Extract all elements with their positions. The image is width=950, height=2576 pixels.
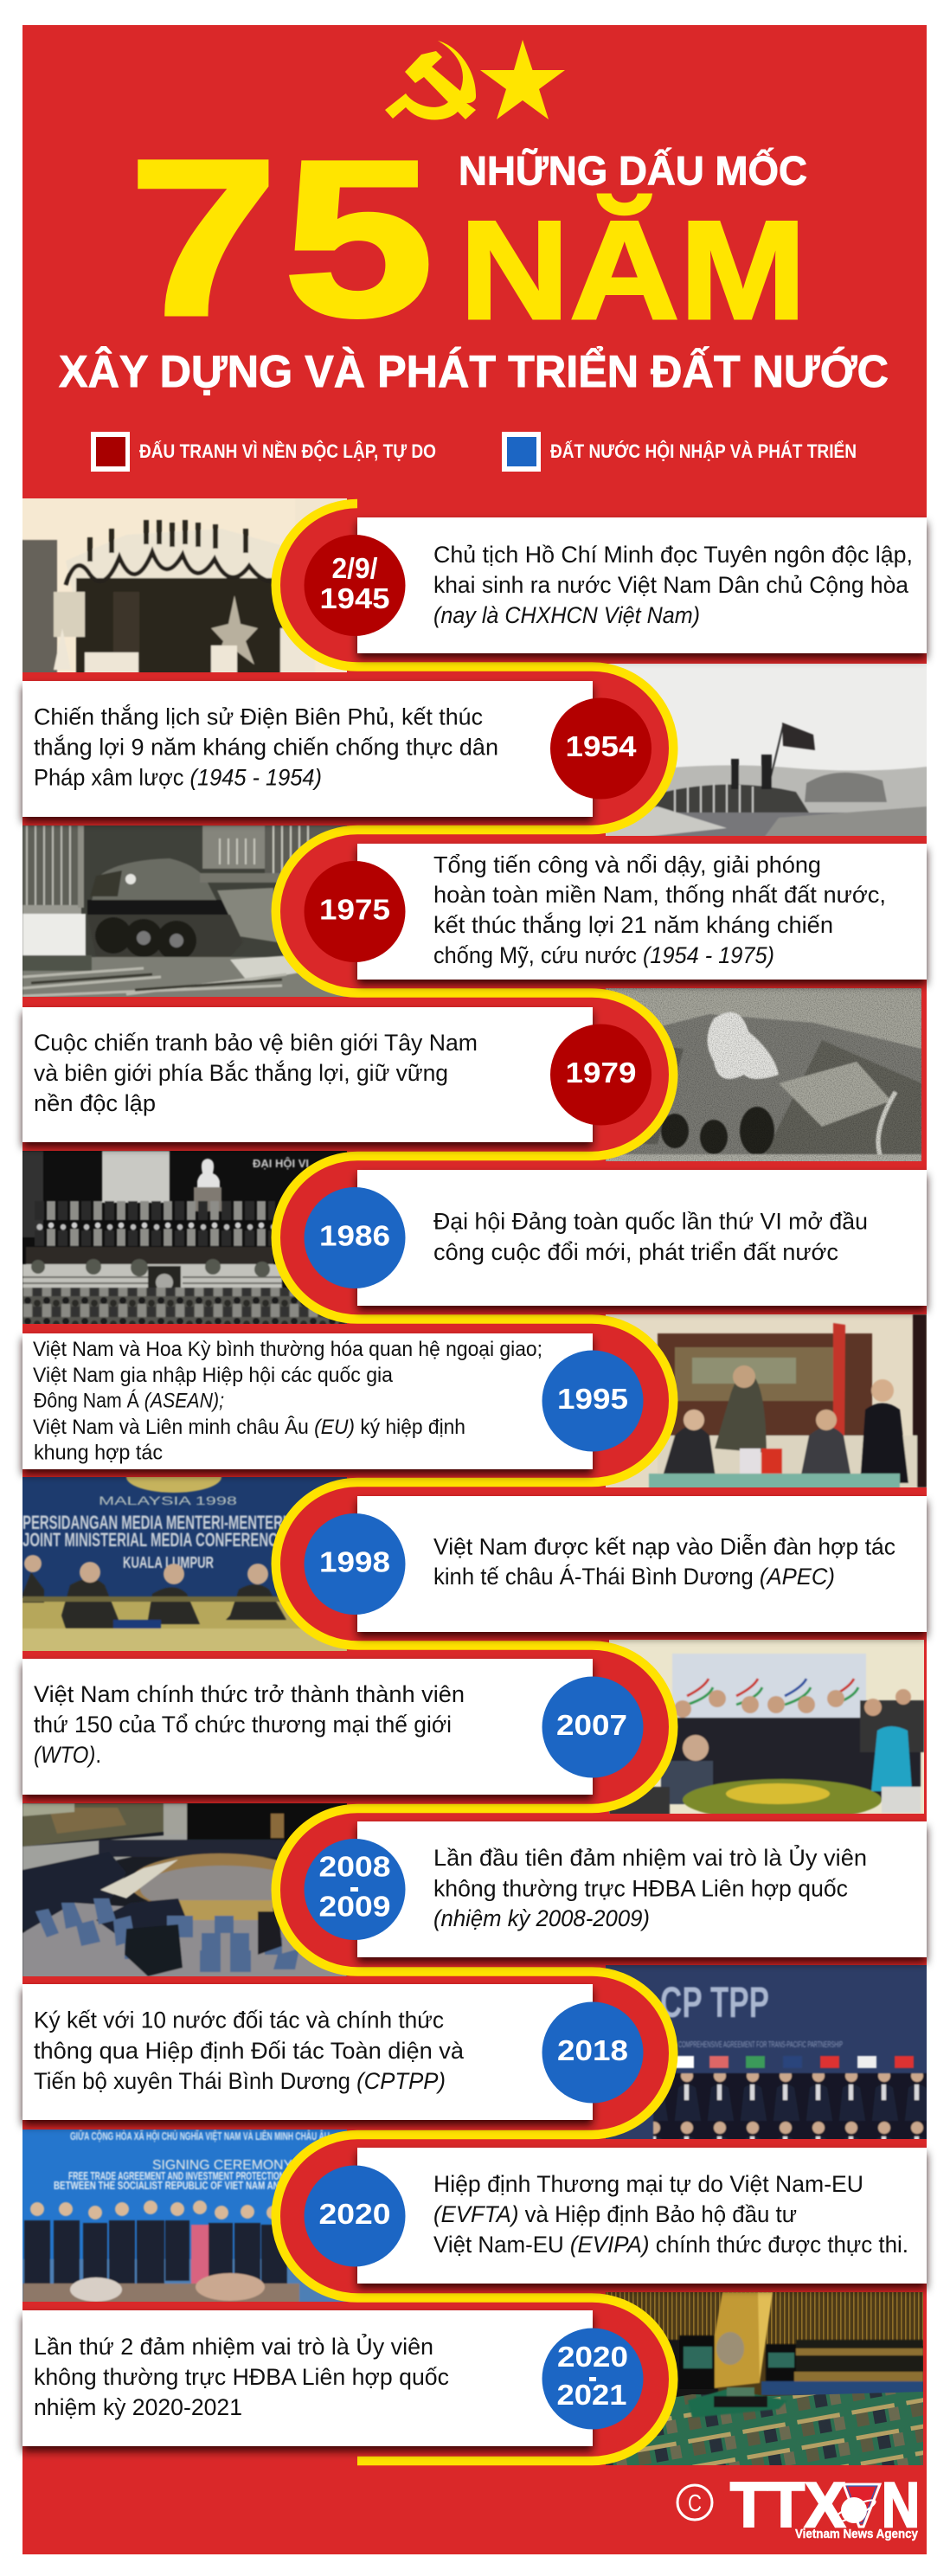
heading: năm: NĂM — [459, 192, 806, 349]
badge: 2020: 2020 — [318, 2198, 391, 2230]
card: 1979: Cuộc chiến tranh bảo vệ biên giới Tây Nam — [34, 1030, 478, 1056]
badge: 1954: 1954 — [566, 730, 637, 762]
badge: 2020-2021 — [542, 2328, 644, 2430]
card: 2018: thông qua Hiệp định Đối tác Toàn diện và — [34, 2038, 465, 2064]
legend label: red: ĐẤU TRANH VÌ NỀN ĐỘC LẬP, TỰ DO — [139, 440, 436, 462]
badge: 1995 — [542, 1350, 644, 1452]
badge: 2020-2021: 2020 — [557, 2341, 628, 2373]
badge: 2018 — [542, 2002, 644, 2103]
heading: xây dựng và phát triển đất nước: XÂY DỰNG VÀ PHÁT TRIỂN ĐẤT NƯỚC — [59, 346, 889, 397]
badge: 2008-2009 — [305, 1839, 405, 1940]
photo: 1998 APEC media conference: MALAYSIA 1998 — [99, 1494, 237, 1507]
photo: 1945 declaration stage — [22, 498, 347, 672]
badge: 1979 — [550, 1025, 652, 1125]
card: 1986: Đại hội Đảng toàn quốc lần thứ VI mở đầu — [433, 1208, 868, 1234]
card: 2008-2009: không thường trực HĐBA Liên hợp quốc — [433, 1876, 848, 1902]
icon: copyright: C — [688, 2489, 702, 2516]
card: 2/9/1945 — [357, 517, 927, 653]
photo: CPTPP signing group: CP TPP — [660, 1978, 769, 2027]
card: 1995 — [22, 1333, 593, 1469]
legend label: blue: ĐẤT NƯỚC HỘI NHẬP VÀ PHÁT TRIỂN — [550, 440, 857, 462]
photo: 1975 tank at the palace gate — [22, 825, 347, 997]
card: 2/9/1945: (nay là CHXHCN Việt Nam) — [433, 602, 700, 628]
photo: UN Security Council chamber — [22, 1803, 347, 1976]
badge: 2020 — [305, 2165, 405, 2267]
card: 1995: Việt Nam gia nhập Hiệp hội các quốc gia — [33, 1364, 394, 1387]
badge: 1975: 1975 — [319, 893, 390, 926]
icon: copyright — [677, 2485, 712, 2520]
badge: 1979: 1979 — [566, 1057, 637, 1089]
card: 1986: công cuộc đổi mới, phát triển đất nước — [433, 1239, 838, 1265]
card: 2018 — [22, 1984, 593, 2120]
photo: UN General Assembly hall — [606, 2292, 923, 2465]
photo: 1998 APEC media conference — [22, 1477, 347, 1651]
card: 2/9/1945: khai sinh ra nước Việt Nam Dân chủ Cộng hòa — [433, 572, 909, 598]
badge: 2/9/1945: 2/9/ — [332, 552, 377, 584]
badge: 1998 — [305, 1513, 405, 1615]
card: 2007 — [22, 1659, 593, 1795]
card: 2020 EU agreements: Việt Nam-EU (EVIPA) chính thức được thực thi. — [433, 2232, 908, 2258]
photo: EVFTA signing ceremony — [22, 2130, 347, 2302]
badge: 2/9/1945: 1945 — [320, 582, 389, 614]
badge: 1986: 1986 — [319, 1220, 390, 1251]
card: 1954: thắng lợi 9 năm kháng chiến chống thực dân — [34, 734, 498, 760]
card: 2008-2009: Lần đầu tiên đảm nhiệm vai trò là Ủy viên — [433, 1843, 867, 1871]
card: 1995: khung hợp tác — [34, 1442, 163, 1464]
card: 2020-2021: nhiệm kỳ 2020-2021 — [34, 2394, 242, 2420]
card: 2008-2009 — [357, 1821, 927, 1957]
big number 75: 7 — [129, 114, 278, 362]
card: 1995: Đông Nam Á (ASEAN); — [34, 1390, 224, 1412]
photo: 1998 APEC media conference: KUALA LUMPUR — [123, 1554, 214, 1571]
badge: 2/9/1945 — [305, 535, 405, 636]
photo: 1979 border war hillside — [606, 988, 921, 1161]
heading: những dấu mốc: NHỮNG DẤU MỐC — [459, 147, 807, 194]
card: 2020-2021 — [22, 2310, 593, 2446]
card: 1975: kết thúc thắng lợi 21 năm kháng chiến — [433, 911, 833, 938]
logo caption: Vietnam News Agency — [795, 2527, 919, 2541]
logo: TTXVN — [730, 2470, 920, 2541]
card: 1975: Tổng tiến công và nổi dậy, giải phóng — [433, 851, 821, 877]
card: 2020 EU agreements: Hiệp định Thương mại tự do Việt Nam-EU — [433, 2171, 863, 2197]
icon: hammer and sickle — [385, 41, 476, 120]
badge: 2007: 2007 — [556, 1709, 627, 1741]
card: 2020 EU agreements — [357, 2148, 927, 2284]
card: 1986 — [357, 1170, 927, 1306]
badge: 2020-2021: 2021 — [557, 2379, 626, 2411]
badge: 2007 — [542, 1677, 644, 1777]
card: 1995: Việt Nam và Liên minh châu Âu (EU) ký hiệp định — [33, 1416, 465, 1439]
card: 1998: kinh tế châu Á-Thái Bình Dương (APEC) — [433, 1564, 835, 1590]
card: 2/9/1945: Chủ tịch Hồ Chí Minh đọc Tuyên ngôn độc lập, — [433, 542, 913, 568]
photo: CPTPP signing group — [606, 1965, 927, 2139]
legend swatch: blue — [502, 432, 541, 472]
card: 2007: (WTO). — [34, 1742, 101, 1768]
card: 1975 — [357, 844, 927, 980]
icon: star — [480, 40, 565, 119]
card: 1954 — [22, 681, 593, 817]
photo: Dien Bien Phu flag on bunker — [606, 664, 927, 836]
card: 2007: thứ 150 của Tổ chức thương mại thế giới — [34, 1712, 452, 1738]
card: 1995: Việt Nam và Hoa Kỳ bình thường hóa quan hệ ngoại giao; — [33, 1338, 542, 1361]
header — [59, 40, 889, 397]
card: 1975: chống Mỹ, cứu nước (1954 - 1975) — [433, 942, 774, 968]
badge: 1995: 1995 — [557, 1383, 628, 1415]
badge: 2008-2009: 2008 — [318, 1850, 391, 1883]
photo: 1995 signing with the United States — [606, 1314, 927, 1487]
card: 2018: Tiến bộ xuyên Thái Bình Dương (CPTPP) — [34, 2068, 446, 2094]
badge: 2008-2009: 2009 — [318, 1890, 391, 1923]
photo: 2007 WTO accession — [609, 1640, 924, 1814]
legend swatch: red — [91, 432, 130, 472]
card: 2020-2021: không thường trực HĐBA Liên hợp quốc — [34, 2364, 449, 2390]
card: 1979: và biên giới phía Bắc thắng lợi, giữ vững — [34, 1059, 448, 1086]
card: 1954: Pháp xâm lược (1945 - 1954) — [34, 765, 322, 791]
big number 75: 5 — [284, 115, 433, 363]
card: 2020-2021: Lần thứ 2 đảm nhiệm vai trò là Ủy viên — [34, 2332, 433, 2360]
logo: TTXVN: N — [882, 2470, 920, 2541]
card: 1975: hoàn toàn miền Nam, thống nhất đất nước, — [433, 882, 886, 908]
card: 2008-2009: (nhiệm kỳ 2008-2009) — [433, 1905, 650, 1931]
badge: 1975 — [305, 861, 405, 962]
card: 2007: Việt Nam chính thức trở thành thành viên — [34, 1681, 465, 1707]
photo: EVFTA signing ceremony: SIGNING CEREMONY — [152, 2158, 292, 2173]
badge: 1998: 1998 — [319, 1545, 390, 1578]
badge: 2018: 2018 — [557, 2034, 628, 2066]
card: 2020 EU agreements: (EVFTA) và Hiệp định Bảo hộ đầu tư — [433, 2201, 797, 2227]
card: 1998: Việt Nam được kết nạp vào Diễn đàn hợp tác — [433, 1533, 895, 1559]
badge: 1954 — [550, 697, 652, 800]
badge: 1986 — [305, 1187, 405, 1288]
legend — [91, 432, 857, 472]
ribbon: yellow serpentine line — [276, 504, 673, 2461]
card: 1979 — [22, 1007, 593, 1142]
card: 1979: nền độc lập — [34, 1090, 156, 1116]
card: 2018: Ký kết với 10 nước đối tác và chính thức — [34, 2007, 444, 2033]
photo: 1986 6th party congress — [22, 1151, 347, 1324]
ribbon: red interior of the serpentine — [276, 504, 673, 2461]
card: 1954: Chiến thắng lịch sử Điện Biên Phủ, kết thúc — [34, 703, 483, 730]
logo: TTXVN: TTX — [730, 2470, 845, 2541]
card: 1998 — [357, 1496, 927, 1632]
photo: 1986 6th party congress: ĐẠI HỘI VI — [253, 1157, 309, 1170]
big number 75 — [129, 114, 433, 363]
footer: copyright and agency logo — [677, 2470, 920, 2541]
